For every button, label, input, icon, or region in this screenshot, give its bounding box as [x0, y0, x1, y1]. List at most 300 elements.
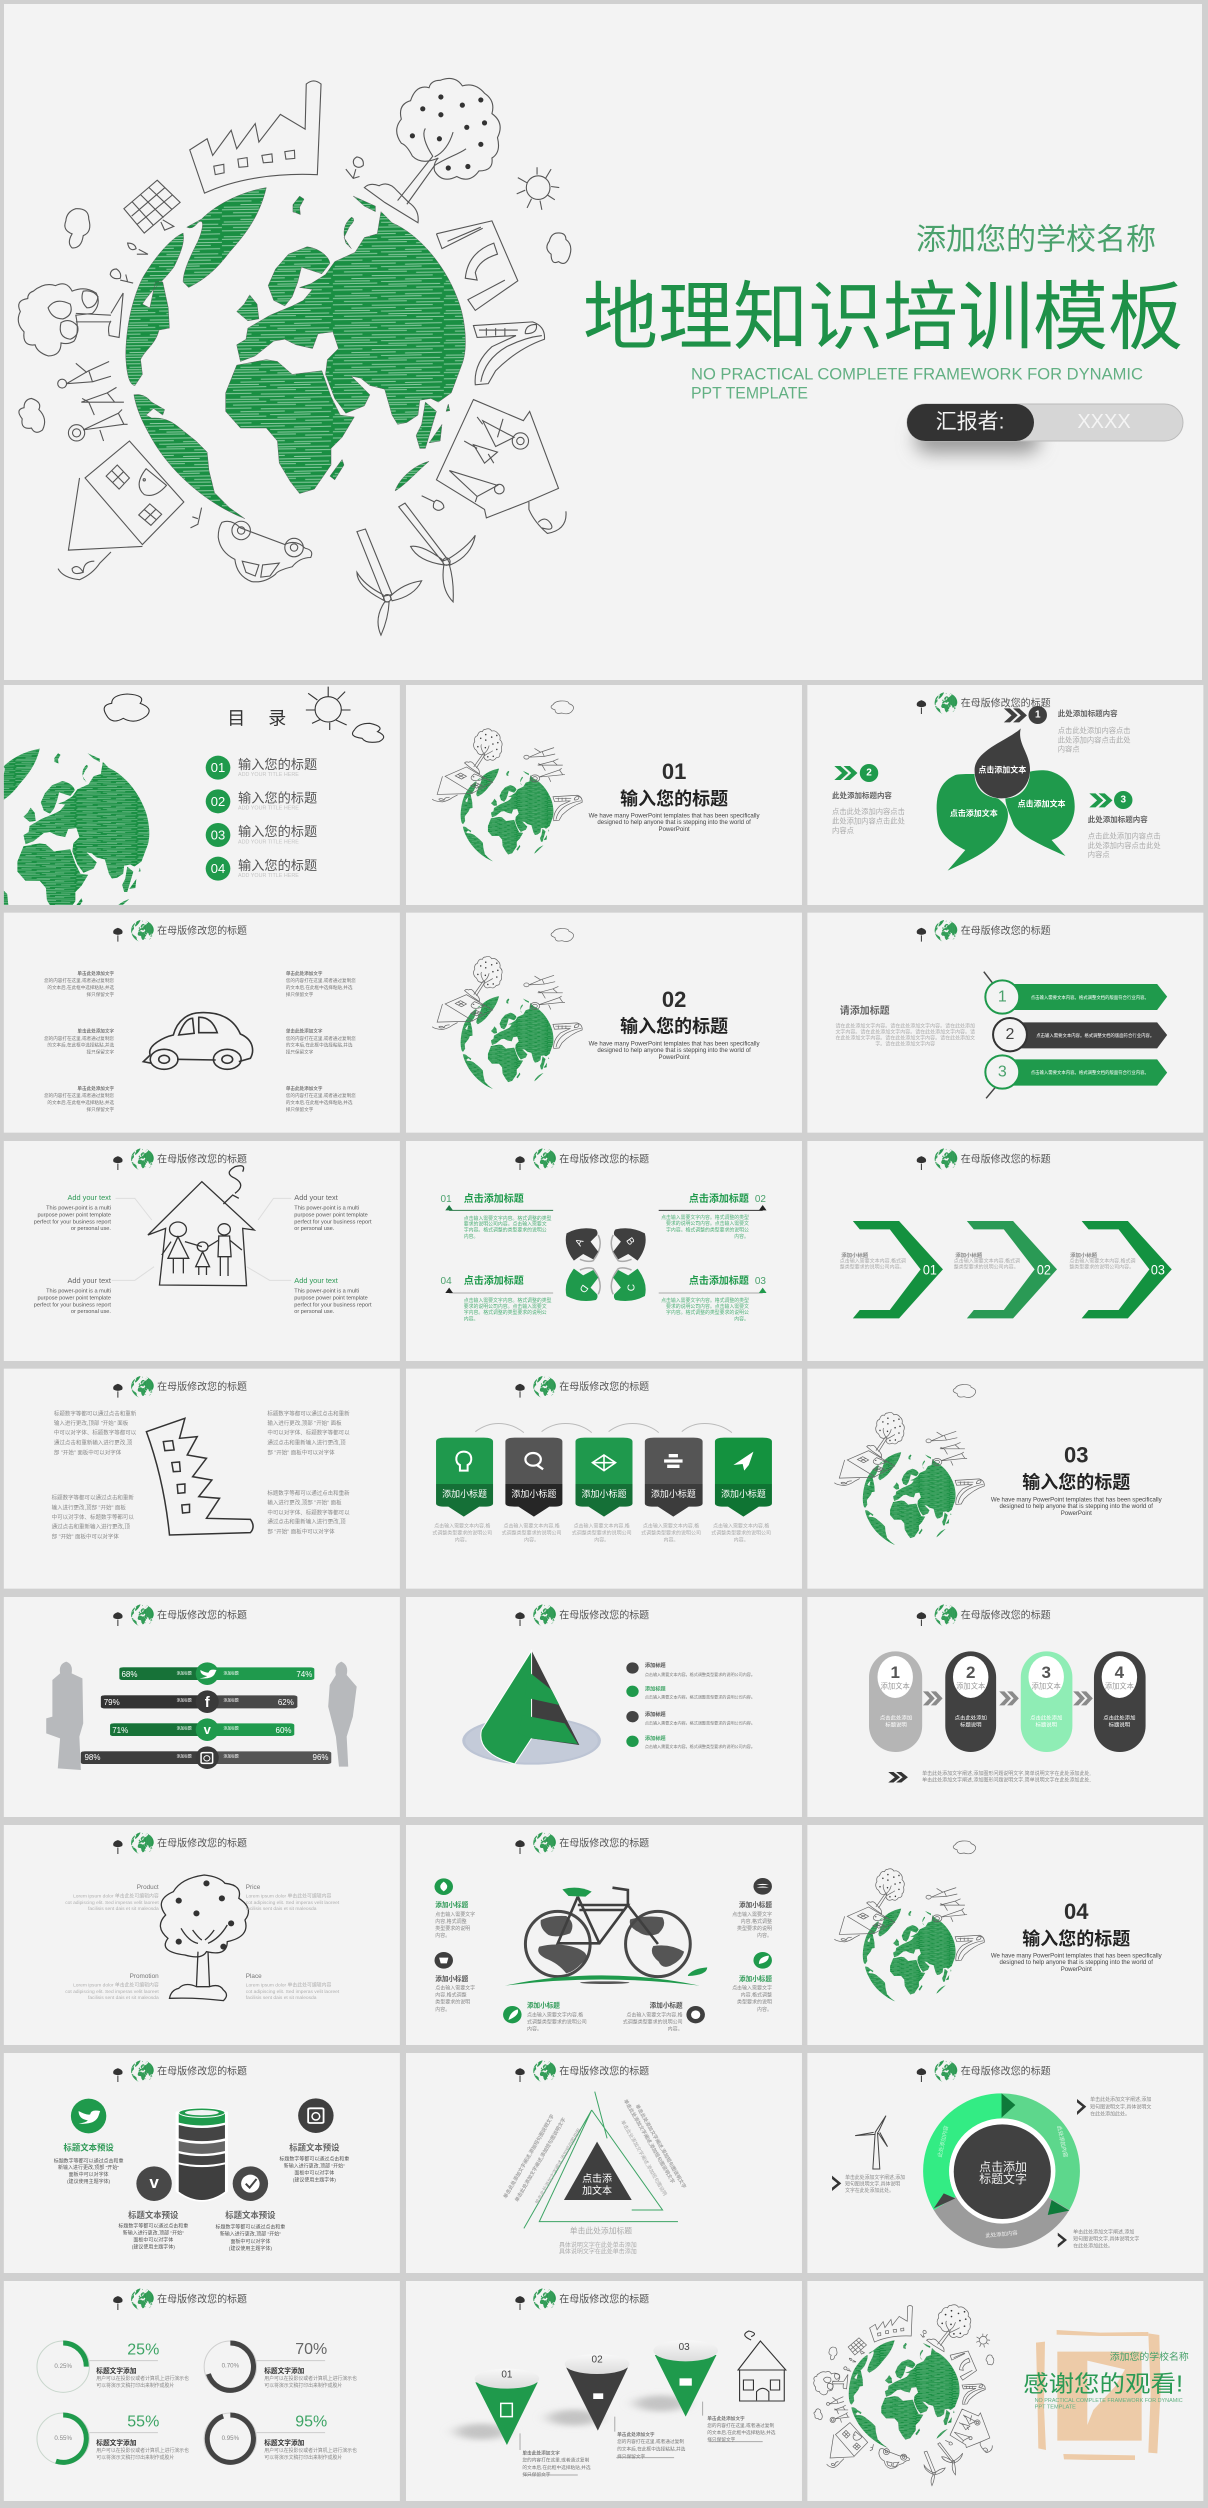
- slide: car with six text blocks: [4, 913, 400, 1133]
- callout 01: 点击添加标题: [464, 1192, 524, 1205]
- bar 3: v: [204, 1722, 212, 1737]
- text: promotion: Lorem ipsum dolor 单击此处可编辑内容: [73, 1981, 159, 1988]
- item 2: 此处添加内容点击此处: [832, 816, 906, 825]
- slide: four pills: [807, 1597, 1203, 1817]
- slide: section 04: 04: [1064, 1899, 1089, 1924]
- slide: section 02: [406, 913, 802, 1133]
- rotated captions: 单击此处添加文字阐述,添加短句图说明文字: [634, 2103, 688, 2190]
- pill 4: 添加文本: [1105, 1681, 1135, 1690]
- text: promotion: Promotion: [130, 1973, 159, 1980]
- slide: section 03: 输入您的标题: [1022, 1472, 1130, 1493]
- bar 2: [101, 1690, 297, 1713]
- captions: 式调整类型要求的说明公司: [572, 1529, 632, 1536]
- text: bottom right: 内容。: [668, 2026, 683, 2033]
- captions: 内容。: [455, 1537, 470, 1544]
- slide: four gauges: 在母版修改您的标题: [157, 2292, 247, 2305]
- pill 1: 1: [890, 1663, 900, 1682]
- slide: segmented ring: 在母版修改您的标题: [961, 2064, 1051, 2077]
- arcs: [475, 1424, 732, 1433]
- text: left bottom: 点击输入需要文字: [435, 1985, 475, 1992]
- item 3: [1088, 791, 1161, 859]
- subtitle: [691, 364, 1143, 402]
- pill 1: 标题说明: [885, 1720, 907, 1728]
- item 1: 点击此处添加内容点击: [1058, 726, 1131, 735]
- text: top left: [34, 1193, 111, 1232]
- bar 3: 添加标题: [224, 1726, 239, 1731]
- text: price: facilisis sent dais et sit maleosda: [246, 1906, 317, 1912]
- bar 2: 79%: [104, 1698, 120, 1707]
- left text: 文字内容。请在此处添加文字内容。请在此处添加文字内容。请: [835, 1029, 975, 1036]
- callout: top right: 单击此处添加文字阐述,添加: [1090, 2096, 1151, 2103]
- text: top right: or personal use.: [294, 1226, 335, 1232]
- gauge 70 percent: 标题文字添加: [264, 2366, 305, 2375]
- text block 2: 您的内容打在这里,或者通过复制: [617, 2438, 684, 2445]
- text blocks: [52, 1409, 350, 1540]
- pill 3: 标题说明: [1035, 1720, 1057, 1728]
- callout 01: 内容。: [464, 1233, 478, 1240]
- item 1: 1: [1035, 709, 1041, 720]
- text: bottom left: 添加小标题: [527, 2000, 560, 2009]
- text: left top: 类型要求的说明: [435, 1925, 470, 1932]
- gauge 70 percent: 70%: [295, 2341, 327, 2358]
- item 2: [832, 764, 906, 835]
- bar 2: f: [205, 1694, 211, 1711]
- icon: wind turbine: [855, 2116, 888, 2169]
- text: place: Lorem ipsum dolor 单击此处可编辑内容: [246, 1981, 331, 1988]
- left text blocks: 择只保留文字: [87, 1106, 114, 1113]
- text: top right: This power-point is a multi: [294, 1205, 359, 1211]
- box 2: [505, 1438, 562, 1517]
- box 3: 添加小标题: [582, 1488, 626, 1499]
- slide: five tag boxes: [406, 1369, 802, 1589]
- petals: C: [627, 1284, 638, 1291]
- text blocks: 输入进行更改,顶部 "开始" 面板: [267, 1419, 342, 1427]
- thank you text: 感谢您的观看!: [1023, 2370, 1183, 2396]
- slide: four gauges: [4, 2281, 400, 2501]
- item 2: 2: [866, 767, 872, 778]
- slide: crooked building: [4, 1369, 400, 1589]
- gauge 25 percent: [37, 2341, 189, 2392]
- left text blocks: 择只保留文字: [87, 991, 114, 998]
- captions: 点击输入需要文本内容,格: [574, 1523, 630, 1530]
- text: bottom right: 标题文本预设: [225, 2210, 276, 2220]
- slide: car with six text blocks: 在母版修改您的标题: [157, 924, 247, 937]
- text blocks: 标题数字等都可以通过点击和重新: [267, 1489, 350, 1497]
- text: top right: 标题文本预设: [289, 2143, 340, 2153]
- band: rows 3 and 4: [4, 1141, 1203, 1589]
- diagram: triangle arrows: [524, 2092, 678, 2228]
- chevron 03: 整类型要求的说明公司内容。: [1069, 1263, 1134, 1270]
- icon: house with family: [148, 1166, 254, 1286]
- callout 03: 要求的说明公司内容。点击输入需要文: [666, 1303, 749, 1310]
- cone 01: [475, 2369, 539, 2445]
- right text blocks: 择只保留文字: [286, 1106, 314, 1113]
- text blocks: 标题数字等都可以通过点击和重新: [54, 1409, 137, 1417]
- arrows and numbers: 点击输入需要文本内容。格式调整文档的版面符合行业内容。: [1031, 1069, 1149, 1076]
- text blocks: 通过点击和重新输入进行更改,顶: [267, 1438, 346, 1446]
- callout 01: 01: [441, 1194, 452, 1205]
- text block 1: [520, 2433, 591, 2478]
- text: place: cot adipiscing elit. Sed imperas velit laoreet: [246, 1989, 340, 1995]
- box 1: [436, 1438, 493, 1517]
- gauge 25 percent: 可以将演示文稿打印出来制作成胶片: [96, 2382, 174, 2389]
- text: bottom right: purpose power point template: [294, 1295, 368, 1301]
- callout 03: 字内容。格式调整的类型要求的说明公: [666, 1309, 749, 1316]
- item 1: 此处添加标题内容: [1058, 708, 1118, 718]
- illustration: bicycle: [505, 1888, 707, 1986]
- chevron 03: 03: [1151, 1261, 1165, 1277]
- text: right top: 内容,格式调整: [741, 1918, 772, 1925]
- pill 3: 点击此处添加: [1030, 1713, 1062, 1721]
- text block 3: [703, 2402, 776, 2443]
- rotated captions: 单击此处添加文字阐述,添加短句图说明文字: [622, 2098, 676, 2185]
- arrows and numbers: [984, 972, 1167, 1098]
- chevron 01: [840, 1221, 943, 1318]
- item 3: 内容点: [1088, 850, 1110, 859]
- contents heading: 目 录: [227, 708, 286, 728]
- text: bottom right: perfect for your business report: [294, 1302, 372, 1308]
- slide: numbered arrows: 在母版修改您的标题: [961, 924, 1051, 937]
- rotated captions: 单击此处添加文字阐述,添加短句图说明文字: [513, 2116, 567, 2203]
- gauge 55 percent: 55%: [127, 2413, 159, 2430]
- bar 3: [110, 1718, 294, 1741]
- box 2: 添加小标题: [511, 1488, 556, 1499]
- contents list: ADD YOUR TITLE HERE: [238, 839, 299, 845]
- text: bottom left: 标题数字等都可以通过点击和重: [118, 2223, 188, 2230]
- school name: 添加您的学校名称: [1110, 2350, 1189, 2363]
- right text blocks: 单击此处添加文字: [286, 970, 323, 977]
- right text blocks: [286, 970, 356, 1113]
- callout: bottom right: 短句图说明文字,具体说明文字: [1073, 2236, 1139, 2243]
- slide: section 02: We have many PowerPoint templates that has been specifically: [589, 1040, 760, 1047]
- chevron 02: 点击输入需要文本内容,格式调: [954, 1258, 1020, 1265]
- bar 1: 添加标题: [177, 1670, 192, 1675]
- contents list: ADD YOUR TITLE HERE: [238, 806, 299, 812]
- text blocks: 标题数字等都可以通过点击和重新: [52, 1493, 134, 1501]
- text: place: facilisis sent dais et sit maleosda: [246, 1995, 317, 2001]
- subtitle: NO PRACTICAL COMPLETE FRAMEWORK FOR DYNAMIC: [691, 364, 1143, 384]
- callout 03: [659, 1274, 767, 1322]
- captions: 点击输入需要文本内容,格: [643, 1523, 699, 1530]
- callout 02: 02: [755, 1194, 766, 1205]
- callout: bottom right: 单击此处添加文字阐述,添加: [1073, 2229, 1134, 2236]
- connector lines: [112, 1198, 291, 1280]
- bubble chart: 点击添加文本: [978, 764, 1026, 774]
- right text blocks: 单击此处添加文字: [286, 1027, 323, 1034]
- contents list: 输入您的标题: [238, 789, 317, 805]
- gauge 70 percent: [204, 2341, 357, 2392]
- gauge 95 percent: 可以将演示文稿打印出来制作成胶片: [264, 2454, 342, 2461]
- callout 02: 点击输入需要文字内容。格式调整的类型: [661, 1214, 749, 1221]
- text: bottom left: 式调整类型要求的说明公司: [527, 2018, 587, 2025]
- text: bottom left: 标题文本预设: [128, 2210, 179, 2220]
- bar 4: 96%: [312, 1753, 328, 1762]
- chevron 02: [954, 1221, 1057, 1318]
- legend: 添加标题: [645, 1661, 666, 1669]
- callout 02: 要求的说明公司内容。点击输入需要文: [666, 1220, 749, 1227]
- reporter pill: 汇报者:: [936, 410, 1004, 434]
- text: promotion: facilisis sent dais et sit maleosda: [88, 1995, 159, 2001]
- text blocks: 部 "开始" 面板中可以对字体: [54, 1448, 122, 1456]
- slide: section 04: 输入您的标题: [1022, 1928, 1130, 1949]
- text: bottom right: [215, 2210, 285, 2252]
- bar 1: [119, 1662, 314, 1685]
- text: top left: or personal use.: [71, 1226, 111, 1232]
- diagram: triangle arrows: 加文本: [582, 2184, 612, 2197]
- cone 03: 03: [679, 2342, 690, 2353]
- text: top left: purpose power point template: [37, 1212, 111, 1218]
- bottom caption: 单击此处添加标题: [570, 2225, 632, 2235]
- pill 2: [945, 1651, 996, 1752]
- text block 2: 择只保留文字: [617, 2453, 646, 2460]
- diagram: triangle arrows: 点击添: [582, 2172, 612, 2185]
- gauge 25 percent: 25%: [127, 2341, 159, 2358]
- legend: 点击输入需要文本内容。格式调整类型要求的说明公司内容。: [645, 1719, 755, 1725]
- box 4: 添加小标题: [651, 1488, 696, 1499]
- captions: 内容。: [664, 1537, 678, 1544]
- text: bottom left: 内容。: [527, 2026, 542, 2033]
- text: top right: 面板中可以对字体: [294, 2169, 334, 2176]
- text: bottom left: Add your text: [67, 1276, 111, 1285]
- item 1: [1004, 706, 1131, 753]
- text block 3: 您的内容打在这里,或者通过复制: [707, 2422, 774, 2429]
- arrows and numbers: 点击输入需要文本内容。格式调整文档的版面符合行业内容。: [1031, 994, 1149, 1001]
- cone 03: [653, 2340, 718, 2417]
- text blocks: 中可以对字体、标题数字等都可以: [267, 1508, 350, 1516]
- box 5: [715, 1438, 772, 1517]
- text: bottom left: [118, 2210, 188, 2250]
- chevron 03: 添加小标题: [1070, 1251, 1098, 1259]
- text: bottom left: purpose power point template: [37, 1295, 111, 1301]
- slide: section 03: [807, 1369, 1203, 1589]
- callout 03: 03: [755, 1276, 766, 1287]
- text: bottom right: 添加小标题: [650, 2000, 683, 2009]
- callout: bottom right: [1058, 2229, 1139, 2250]
- text: bottom right: 标题数字等都可以通过点击和重: [215, 2224, 285, 2231]
- slide: segmented ring: [807, 2053, 1203, 2273]
- text: top left: 标题数字等都可以通过点击和重: [54, 2157, 124, 2164]
- text: right bottom: [732, 1974, 772, 2013]
- captions: 式调整类型要求的说明公司: [711, 1529, 771, 1536]
- text: right bottom: 内容。: [757, 2006, 772, 2013]
- text: bottom left: [34, 1276, 111, 1315]
- text: bottom left: or personal use.: [71, 1309, 111, 1315]
- slide: globe bicycle: [406, 1825, 802, 2045]
- text: top left: 标题文本预设: [63, 2143, 114, 2153]
- subtitle: PPT TEMPLATE: [691, 384, 808, 402]
- left text: [835, 1004, 975, 1047]
- text: right top: 点击输入需要文字: [732, 1911, 772, 1918]
- chevron 01: 点击输入需要文本内容,格式调: [840, 1258, 906, 1265]
- callout 02: 字内容。格式调整的类型要求的说明公: [666, 1226, 749, 1233]
- rotated captions: 单击此处添加文字阐述,添加短句图说明文字: [502, 2113, 556, 2200]
- footnote: [888, 1770, 1091, 1784]
- slide: database cylinder: 在母版修改您的标题: [157, 2064, 247, 2077]
- callout 01: [441, 1192, 553, 1240]
- arrows and numbers: 2: [1006, 1026, 1015, 1043]
- rotated captions: [502, 2098, 688, 2205]
- chevron 02: 02: [1037, 1261, 1051, 1277]
- petals: [566, 1228, 646, 1301]
- slide: five tag boxes: 在母版修改您的标题: [559, 1380, 649, 1393]
- text: promotion: cot adipiscing elit. Sed imperas velit laoreet: [65, 1989, 159, 1995]
- contents list: ADD YOUR TITLE HERE: [238, 873, 299, 879]
- text: top right: 标题数字等都可以通过点击和重: [279, 2155, 349, 2162]
- text: bottom left: 面板中可以对字体: [133, 2236, 173, 2243]
- text: left top: 内容。: [435, 1932, 450, 1939]
- text blocks: 部 "开始" 面板中可以对字体: [52, 1532, 119, 1540]
- left text blocks: [44, 970, 114, 1113]
- icon: building: [146, 1418, 253, 1535]
- slide: four petals: [406, 1141, 802, 1361]
- subtitle: NO PRACTICAL COMPLETE FRAMEWORK FOR DYNAMIC: [1035, 2398, 1183, 2404]
- bar 3: 60%: [276, 1726, 291, 1735]
- callout 04: 字内容。格式调整的类型要求的说明公: [464, 1309, 547, 1316]
- bottom caption: [559, 2225, 637, 2256]
- legend: 添加标题: [645, 1734, 666, 1742]
- icon: house: [738, 2331, 786, 2401]
- callout: bottom right: 在此处添加此处。: [1073, 2243, 1113, 2250]
- contents list: 03: [211, 827, 225, 842]
- text blocks: 中可以对字体、标题数字等都可以: [267, 1429, 350, 1437]
- pill 1: [869, 1651, 922, 1752]
- chevron 01: 整类型要求的说明公司内容。: [840, 1263, 905, 1270]
- text blocks: 输入进行更改,顶部 "开始" 面板: [54, 1419, 129, 1427]
- chevron 03: 点击输入需要文本内容,格式调: [1069, 1258, 1136, 1265]
- text: price: [246, 1884, 340, 1912]
- slide: section 01: PowerPoint: [659, 826, 690, 833]
- callout: top right: 在此处添加此处。: [1090, 2110, 1130, 2117]
- contents list: [206, 756, 317, 881]
- text: place: Place: [246, 1973, 262, 1980]
- bar 2: 添加标题: [177, 1698, 192, 1703]
- text: bottom right: 新输入进行更改,顶部 "开始": [220, 2231, 281, 2238]
- slide: thank you: [807, 2281, 1203, 2501]
- left text blocks: 单击此处添加文字: [77, 970, 114, 977]
- right text blocks: 的文本后,在此框中选择粘贴,并选: [286, 984, 353, 991]
- gauge 25 percent: 0.25%: [54, 2363, 72, 2370]
- item 2: 点击此处添加内容点击: [832, 807, 905, 816]
- chart: ring: 点击添加: [979, 2160, 1027, 2174]
- gauge 95 percent: 用户可以在投影仪或者计算机上进行演示也: [264, 2447, 357, 2454]
- arrows and numbers: 点击输入需要文本内容。格式调整文档的版面符合行业内容。: [1036, 1032, 1154, 1039]
- slide: section 03: We have many PowerPoint templates that has been specifically: [991, 1496, 1163, 1503]
- text: top right: [279, 2143, 349, 2184]
- slide: four pills: 在母版修改您的标题: [961, 1608, 1051, 1621]
- text: right bottom: 添加小标题: [739, 1974, 772, 1983]
- contents list: 输入您的标题: [238, 756, 317, 772]
- legend: 添加标题: [645, 1710, 666, 1718]
- pill 1: 点击此处添加: [880, 1713, 912, 1721]
- bubble chart: 点击添加文本: [1018, 798, 1066, 808]
- slide: section 02: 输入您的标题: [620, 1016, 728, 1037]
- captions: 点击输入需要文本内容,格: [713, 1523, 769, 1530]
- right text blocks: 您的内容打在这里,或者通过复制您: [286, 1035, 356, 1042]
- gauge 95 percent: 标题文字添加: [264, 2438, 305, 2447]
- text: top left: 新输入进行更改,顶部 "开始": [58, 2164, 119, 2171]
- slide: triangle cycle: 在母版修改您的标题: [559, 2064, 649, 2077]
- captions: 式调整类型要求的说明公司: [641, 1529, 701, 1536]
- chart: ring: 此处添加内容: [935, 2124, 950, 2158]
- text: price: cot adipiscing elit. Sed imperas velit laoreet: [246, 1900, 340, 1906]
- item 2: 内容点: [832, 826, 854, 835]
- pill 4: 标题说明: [1109, 1720, 1130, 1728]
- legend: 点击输入需要文本内容。格式调整类型要求的说明公司内容。: [645, 1743, 755, 1749]
- contents list: 输入您的标题: [238, 823, 317, 839]
- callout 01: 点击输入需要文字内容。格式调整的类型: [464, 1215, 552, 1222]
- pill 2: 标题说明: [960, 1720, 981, 1728]
- text: left top: [435, 1900, 475, 1939]
- text: bottom right: 点击输入需要文字内容,格: [626, 2011, 683, 2018]
- text: top left: 面板中可以对字体: [69, 2171, 109, 2178]
- pill 4: 点击此处添加: [1103, 1713, 1136, 1721]
- legend: 点击输入需要文本内容。格式调整类型要求的说明公司内容。: [645, 1671, 755, 1677]
- text: top left: This power-point is a multi: [46, 1205, 111, 1211]
- gauge 95 percent: 95%: [295, 2413, 327, 2430]
- right text blocks: 您的内容打在这里,或者通过复制您: [286, 977, 356, 984]
- text: product: [65, 1884, 159, 1912]
- text blocks: 部 "开始" 面板中可以对字体: [267, 1527, 335, 1535]
- icon: tree: [160, 1875, 248, 2001]
- cone 01: 01: [501, 2369, 513, 2380]
- text: top right: (建议使用主题字体): [293, 2177, 336, 2184]
- pill 4: 4: [1115, 1663, 1125, 1682]
- footnote: 单击此处添加文字阐述,添加图形问题说明文字,简单说明文字在此处添加此处,: [922, 1777, 1091, 1784]
- text: left top: 添加小标题: [435, 1900, 469, 1909]
- chevron 02: 添加小标题: [955, 1251, 983, 1259]
- slide: database cylinder: [4, 2053, 400, 2273]
- callout 03: 点击添加标题: [689, 1274, 749, 1287]
- text block 1: 择只保留文字: [522, 2471, 551, 2478]
- text block 2: [615, 2417, 686, 2460]
- gauge 55 percent: 可以将演示文稿打印出来制作成胶片: [96, 2454, 174, 2461]
- callout: left: [832, 2174, 905, 2194]
- petals: B: [623, 1236, 636, 1248]
- left text blocks: 单击此处添加文字: [77, 1085, 114, 1092]
- text: left bottom: 添加小标题: [435, 1974, 469, 1983]
- callout 04: 04: [441, 1276, 452, 1287]
- text: product: Lorem ipsum dolor 单击此处可编辑内容: [73, 1892, 159, 1899]
- text blocks: 通过点击和重新输入进行更改,顶: [267, 1518, 346, 1526]
- text block 3: 单击此处添加文字: [707, 2415, 745, 2422]
- callout 01: 要求的说明公司内容。点击输入需要文: [464, 1220, 547, 1227]
- arrows and numbers: 3: [998, 1063, 1007, 1080]
- captions: [432, 1523, 771, 1544]
- callout 04: [441, 1274, 553, 1322]
- cone 02: [565, 2354, 629, 2431]
- item 3: 此处添加标题内容: [1088, 814, 1148, 824]
- slide: globe bicycle: 在母版修改您的标题: [559, 1836, 649, 1849]
- text: right top: 添加小标题: [739, 1900, 772, 1909]
- legend: [626, 1661, 755, 1749]
- text block 1: 单击此处添加文字: [522, 2449, 560, 2456]
- right text blocks: 的文本后,在此框中选择粘贴,并选: [286, 1041, 353, 1048]
- slide: numbered arrows: [807, 913, 1203, 1133]
- text blocks: 中可以对字体、标题数字等都可以: [52, 1513, 134, 1521]
- icons: v: [149, 2173, 159, 2192]
- bar 2: 添加标题: [224, 1698, 239, 1703]
- text blocks: 标题数字等都可以通过点击和重新: [267, 1409, 350, 1417]
- text: left bottom: 内容。: [435, 2006, 450, 2013]
- chart: cone: [462, 1651, 601, 1765]
- chart: ring: 此处添加内容: [1055, 2125, 1070, 2159]
- slide: triangle cycle: [406, 2053, 802, 2273]
- right text blocks: 单击此处添加文字: [286, 1085, 323, 1092]
- text: bottom left: This power-point is a multi: [46, 1288, 111, 1294]
- text blocks: 通过点击和重新输入进行更改,顶: [52, 1523, 130, 1531]
- text: right top: 类型要求的说明: [737, 1925, 772, 1932]
- bubble chart: [937, 728, 1075, 871]
